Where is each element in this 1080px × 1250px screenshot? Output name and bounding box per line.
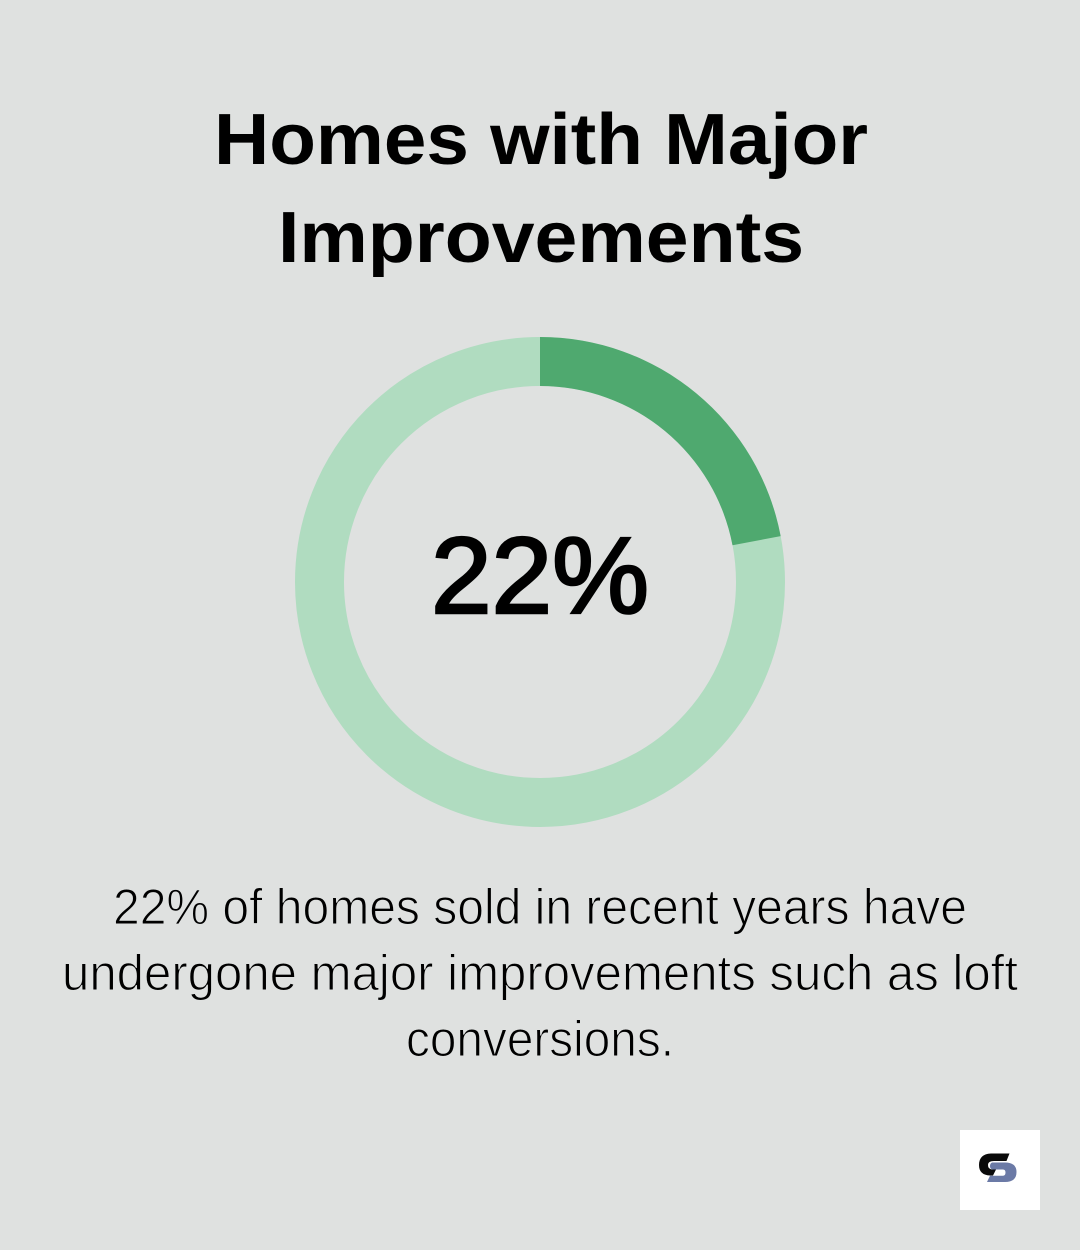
title	[214, 100, 868, 278]
title: Homes with Major	[214, 100, 868, 180]
donut segment	[540, 337, 781, 545]
description text: 22% of homes sold in recent years have	[113, 879, 967, 935]
description text: conversions.	[406, 1011, 674, 1067]
logo badge	[960, 1130, 1040, 1210]
description text	[62, 879, 1018, 1067]
donut value: 22%	[431, 515, 649, 637]
donut track	[320, 362, 760, 802]
title: Improvements	[278, 198, 804, 278]
donut chart: 22%	[320, 337, 781, 802]
logo mark	[979, 1154, 1016, 1182]
description text: undergone major improvements such as loft	[62, 945, 1018, 1001]
